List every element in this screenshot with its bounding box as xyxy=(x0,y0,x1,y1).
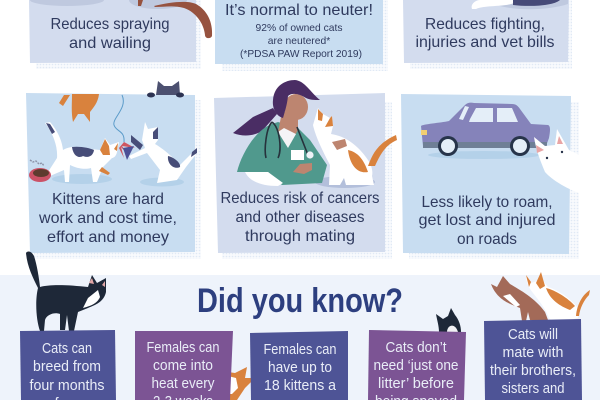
text: one litter: need ‘just one xyxy=(374,357,458,374)
text: less likely: Less likely to roam, xyxy=(422,194,552,211)
icon: white cat playing xyxy=(129,122,197,186)
text: reduces fighting: injuries and vet bills xyxy=(416,34,554,51)
icon: orange kitten xyxy=(228,367,255,400)
panel: normal to neuter xyxy=(215,0,388,71)
card: breed from four months xyxy=(20,330,116,400)
text: heat: Females can xyxy=(146,339,220,356)
heading: did you know: Did you know? xyxy=(197,282,403,320)
text: mate: sisters and xyxy=(502,380,564,397)
text: kittens a year: have up to xyxy=(268,359,332,376)
text: kittens: effort and money xyxy=(47,229,169,246)
text: reduces risk: and other diseases xyxy=(236,209,364,226)
text: heat: heat every xyxy=(152,375,215,392)
panel: reduces fighting xyxy=(403,0,572,69)
icon: vet with cat xyxy=(233,80,397,188)
icon: black cat peeking xyxy=(436,308,461,332)
text: reduces fighting: Reduces fighting, xyxy=(425,16,545,33)
text: reduces risk: Reduces risk of cancers xyxy=(220,190,380,207)
text: normal to neuter: (*PDSA PAW Report 2019) xyxy=(240,49,362,60)
icon: white cat peeking xyxy=(534,129,600,204)
text: kittens a year: Females can xyxy=(264,341,336,358)
text: one litter: Cats don’t xyxy=(386,339,447,356)
text: breed: Cats can xyxy=(42,340,92,357)
text: less likely: get lost and injured xyxy=(418,212,556,229)
icon: black and white cat xyxy=(26,252,106,331)
text: kittens: Kittens are hard xyxy=(52,191,164,208)
icon: dark cat peeking xyxy=(147,81,184,98)
card: just one litter xyxy=(368,330,466,400)
text: heat: come into xyxy=(153,357,213,374)
card: 18 kittens a year xyxy=(250,331,348,400)
panel: did you know background xyxy=(0,252,600,400)
text: breed: four months xyxy=(30,377,104,394)
card: brothers and sisters xyxy=(484,319,582,400)
icon: brown and calico cats xyxy=(491,272,590,322)
text: mate: their brothers, xyxy=(490,362,576,379)
icon: food bowl xyxy=(29,160,51,182)
text: breed: breed from xyxy=(33,358,101,375)
icon: cat shadows and brown tail xyxy=(30,0,212,38)
panel: kittens are hard work xyxy=(26,81,201,259)
icon: calico cat xyxy=(45,122,119,184)
text: reduces risk: through mating xyxy=(245,228,355,245)
text: mate: mate with xyxy=(502,344,564,361)
panel: reduces risk of cancers xyxy=(214,80,397,259)
text: kittens a year: 18 kittens a xyxy=(264,377,337,394)
icon: car xyxy=(421,103,550,159)
icon: toy on string xyxy=(114,95,135,160)
text: mate: Cats will xyxy=(508,326,558,343)
icon: orange kitten hanging xyxy=(59,94,99,122)
icon: cat lying xyxy=(466,0,568,9)
text: normal to neuter: 92% of owned cats xyxy=(255,23,343,34)
text: reduces spraying: Reduces spraying xyxy=(50,16,170,33)
text: normal to neuter: are neutered* xyxy=(268,36,330,47)
text: reduces spraying: and wailing xyxy=(69,35,151,52)
card: heat every 2-3 weeks xyxy=(135,331,233,400)
text: kittens: work and cost time, xyxy=(38,210,177,227)
panel: less likely to roam xyxy=(401,94,600,259)
text: one litter: litter’ before xyxy=(378,375,454,392)
panel: reduces spraying xyxy=(29,0,212,69)
text: normal to neuter: It’s normal to neuter! xyxy=(225,2,373,19)
text: less likely: on roads xyxy=(457,231,517,248)
